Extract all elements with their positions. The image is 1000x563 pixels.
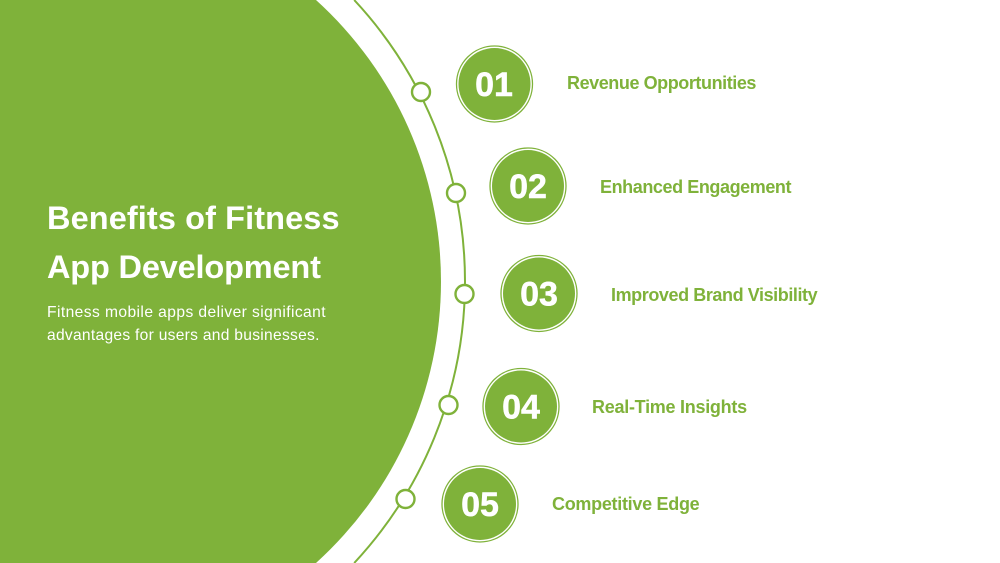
badge 04: 04 xyxy=(502,388,540,426)
badge 01 xyxy=(456,46,532,122)
subtitle: Fitness mobile apps deliver significant xyxy=(47,304,326,321)
badge 05: 05 xyxy=(461,486,499,524)
label: Competitive Edge: Competitive Edge xyxy=(552,494,699,514)
panel: green semicircle xyxy=(0,0,441,563)
label: Enhanced Engagement: Enhanced Engagement xyxy=(600,177,791,197)
badge 02 xyxy=(490,148,566,224)
badge 03 xyxy=(501,256,577,332)
title: Benefits of Fitness xyxy=(47,200,340,236)
label: Revenue Opportunities: Revenue Opportunities xyxy=(567,73,756,93)
subtitle xyxy=(47,304,326,344)
badge 02: 02 xyxy=(509,168,547,206)
label: Improved Brand Visibility: Improved Brand Visibility xyxy=(611,285,817,305)
badge 03: 03 xyxy=(520,276,558,314)
badge 01: 01 xyxy=(475,66,513,104)
arc line xyxy=(354,0,465,563)
title xyxy=(47,200,340,285)
subtitle: advantages for users and businesses. xyxy=(47,327,320,344)
badge 04 xyxy=(483,368,559,444)
badge 05 xyxy=(442,466,518,542)
label: Real-Time Insights: Real-Time Insights xyxy=(592,397,747,417)
timeline nodes xyxy=(396,83,474,508)
title: App Development xyxy=(47,249,321,285)
